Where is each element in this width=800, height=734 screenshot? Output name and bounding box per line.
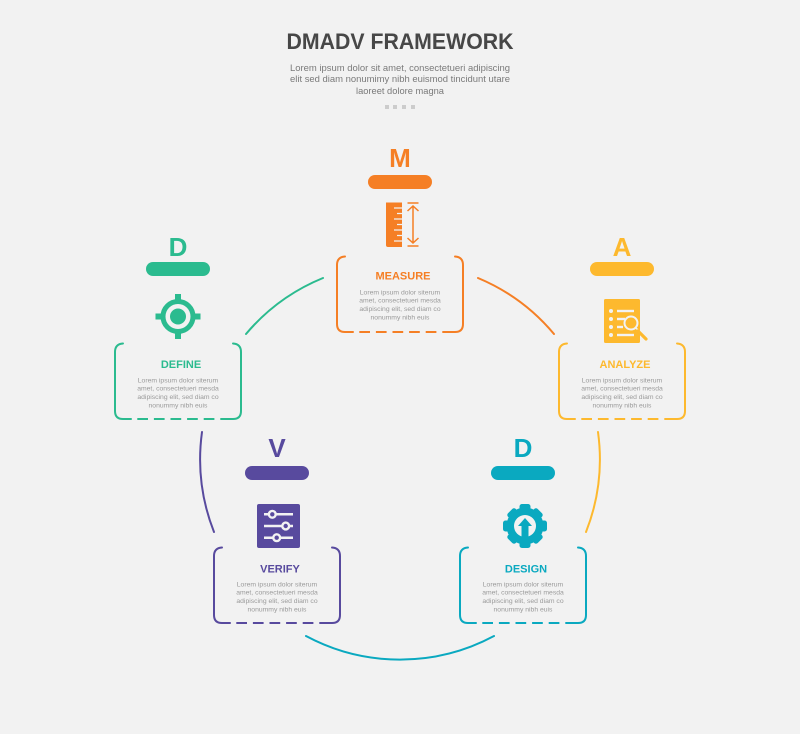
title divider dots (385, 105, 415, 109)
panel: define (115, 232, 241, 419)
panel: design (460, 433, 586, 623)
description: Lorem ipsum dolor siterum (138, 378, 219, 384)
description: nonummy nibh euis (593, 402, 652, 409)
description: amet, consectetueri mesda (581, 386, 663, 393)
name: DESIGN (505, 564, 547, 576)
card outline (337, 256, 463, 332)
panel: analyze (559, 232, 685, 419)
description: nonummy nibh euis (371, 314, 430, 321)
description: adipiscing elit, sed diam co (137, 394, 219, 401)
name: DEFINE (161, 359, 201, 371)
card outline (115, 344, 241, 419)
arc: analyze to design (586, 432, 600, 532)
arc: define to measure (246, 278, 323, 334)
arc: verify to define (200, 432, 214, 532)
card outline (460, 548, 586, 623)
letter D: D (169, 232, 187, 262)
letter A: A (613, 232, 632, 262)
icon: target (156, 294, 200, 339)
subtitle text block: elit sed diam nonumimy nibh euismod tincidunt utare (290, 74, 510, 84)
description: Lorem ipsum dolor siterum (237, 582, 318, 588)
bar (146, 262, 210, 276)
bar (590, 262, 654, 276)
card outline (214, 548, 340, 623)
description: amet, consectetueri mesda (482, 590, 564, 597)
description (482, 582, 564, 613)
description (359, 290, 441, 321)
title: DMADV FRAMEWORK (286, 29, 514, 54)
description: adipiscing elit, sed diam co (359, 306, 441, 313)
letter M: M (389, 143, 411, 173)
description (137, 378, 219, 409)
icon: gear with up arrow (503, 504, 547, 548)
panel: verify (214, 433, 340, 623)
letter D: D (514, 433, 532, 463)
description: nonummy nibh euis (248, 606, 307, 613)
description (236, 582, 318, 613)
description (581, 378, 663, 409)
icon: document with magnifier (604, 299, 646, 343)
panel: measure (337, 143, 463, 332)
subtitle text block: laoreet dolore magna (356, 86, 445, 96)
description: Lorem ipsum dolor siterum (360, 290, 441, 296)
description: Lorem ipsum dolor siterum (582, 378, 663, 384)
bar (245, 466, 309, 480)
arc: measure to analyze (478, 278, 554, 334)
subtitle text block: Lorem ipsum dolor sit amet, consectetueri adipiscing (290, 63, 510, 73)
subtitle text block (290, 63, 510, 96)
name: VERIFY (260, 564, 301, 576)
name: MEASURE (375, 270, 431, 282)
bar (368, 175, 432, 189)
bar (491, 466, 555, 480)
description: amet, consectetueri mesda (137, 386, 219, 393)
description: nonummy nibh euis (149, 402, 208, 409)
icon: ruler with arrow (386, 202, 418, 247)
icon: sliders (257, 504, 300, 548)
description: amet, consectetueri mesda (236, 590, 318, 597)
description: Lorem ipsum dolor siterum (483, 582, 564, 588)
description: amet, consectetueri mesda (359, 298, 441, 305)
card outline (559, 344, 685, 419)
arc: design to verify (306, 636, 494, 660)
letter V: V (268, 433, 286, 463)
description: adipiscing elit, sed diam co (236, 598, 318, 605)
description: adipiscing elit, sed diam co (581, 394, 663, 401)
description: adipiscing elit, sed diam co (482, 598, 564, 605)
name: ANALYZE (600, 359, 650, 371)
description: nonummy nibh euis (494, 606, 553, 613)
